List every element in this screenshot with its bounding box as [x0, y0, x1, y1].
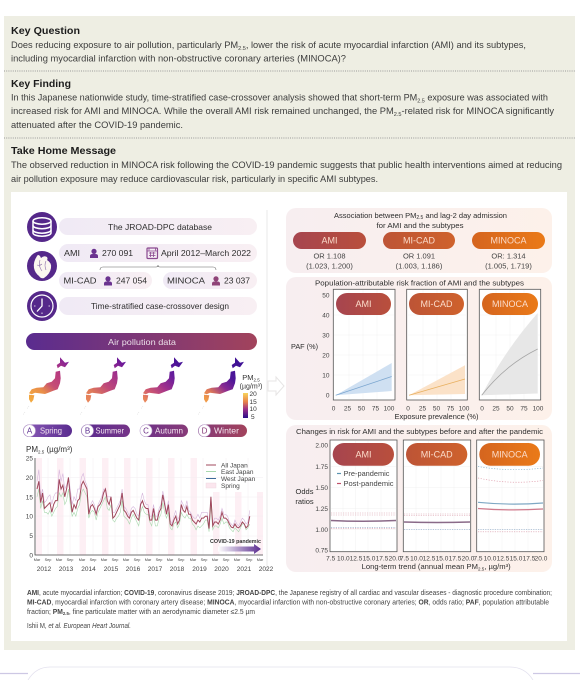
legend: PM2.5 colour bar: 5 — [251, 414, 255, 421]
text: key question: 2.5 — [238, 46, 246, 52]
pill: winter: Winter — [214, 426, 239, 436]
line: East Japan — [37, 489, 250, 532]
chart: monthly PM2.5 time series: (µg/m³) — [44, 445, 73, 454]
text: key question: Key Question — [11, 25, 80, 37]
chart: monthly PM2.5 time series: 25 — [26, 456, 33, 462]
pill: AMI count and period: 270 091 — [102, 248, 133, 258]
panel: changes before and after pandemic: 20.0 — [462, 556, 475, 562]
result: MI-CAD OR — [396, 252, 443, 270]
text: key finding — [11, 78, 554, 130]
panel: population-attributable fraction: 75 — [372, 406, 379, 412]
text: take home message: Take Home Message — [11, 145, 116, 157]
text: abbreviations footnote: AMI, acute myocardial infarction; COVID-19, coronavirus disease 2019; JROAD-DPC, the Japanese registry of all cardiac and vascular diseases - diagnostic procedure combination; — [27, 590, 552, 597]
result: AMI OR: OR 1.108 — [313, 252, 346, 260]
panel: changes before and after pandemic: 1.50 — [315, 485, 328, 492]
panel: changes before and after pandemic: 10.0 — [484, 556, 497, 562]
heading pill: study design — [59, 297, 257, 315]
pill: winter: D — [202, 426, 208, 436]
heading pill: database name: The JROAD-DPC database — [108, 222, 212, 232]
panel: population-attributable fraction: 25 — [492, 406, 500, 412]
map: winter — [198, 357, 244, 415]
legend: PM2.5 colour bar: (µg/m³) — [240, 384, 262, 390]
footer card edge — [0, 672, 580, 674]
panel: changes before and after pandemic: 7.5 — [326, 556, 336, 562]
chart: odds ratios AMI: AMI — [355, 450, 372, 460]
pill: MINOCA — [472, 232, 545, 249]
heading pill: study design: Time-stratified case-crossover design — [91, 301, 229, 311]
chart: monthly PM2.5 time series: 2015 — [104, 566, 119, 573]
panel: changes before and after pandemic: 1.25 — [315, 506, 328, 513]
result: MI-CAD OR: OR 1.091 — [403, 252, 435, 260]
legend: PM2.5 colour bar: 10 — [250, 406, 257, 413]
icon: clock — [27, 291, 57, 321]
panel: changes before and after pandemic: Long-term trend (annual mean PM — [362, 562, 476, 571]
text: abbreviations footnote: MI-CAD, myocardial infarction with coronary artery disease; MINOCA, myocardial infarction with non-obstructive coronary arteries; OR, odds ratio; PAF, population attributable — [27, 600, 549, 606]
result: MINOCA OR: OR: 1.314 — [491, 252, 526, 260]
pill: MI-CAD: MI-CAD — [403, 236, 435, 246]
panel: population-attributable fraction: 75 — [447, 406, 454, 412]
chart: odds ratios MI-CAD: MI-CAD — [421, 450, 453, 460]
chart: PAF MINOCA — [479, 289, 541, 400]
chart: monthly PM2.5 time series: 2019 — [192, 566, 207, 573]
chart: monthly PM2.5 time series: 2020 — [214, 566, 229, 573]
chart: monthly PM2.5 time series: Mar — [56, 558, 63, 562]
arrow: COVID-19 pandemic — [210, 539, 261, 554]
pill: AMI: AMI — [321, 236, 338, 246]
text: key finding: 2.5 — [417, 98, 425, 104]
chart: odds ratios AMI — [330, 440, 397, 552]
panel: changes before and after pandemic: 12.5 — [497, 556, 510, 562]
icon: database — [27, 212, 57, 242]
panel: association odds ratios — [286, 208, 552, 273]
pill: summer: B — [85, 426, 90, 436]
chart: monthly PM2.5 time series: Sep — [201, 558, 207, 562]
text: key finding: attenuated after the COVID-19 pandemic. — [11, 120, 183, 130]
legend: time series lines — [206, 462, 256, 490]
pill: summer — [81, 424, 130, 437]
chart: monthly PM2.5 time series: 2012 — [37, 566, 52, 573]
text: key question — [11, 25, 526, 64]
panel: population-attributable fraction: 0 — [406, 406, 410, 412]
chart: PAF MI-CAD: MI-CAD — [420, 299, 453, 309]
panel: population-attributable fraction: 30 — [322, 332, 330, 339]
panel: changes before and after pandemic: 12.5 — [423, 556, 436, 562]
text: abbreviations footnote: , fine particulate matter with an aerodynamic diameter ≤2.5 µm — [69, 609, 255, 616]
pill: autumn: C — [143, 426, 149, 436]
text: take home message: The observed reduction in MINOCA risk following the COVID-19 pandemic suggests that public health interventions aimed at reducing — [11, 160, 562, 170]
chart: monthly PM2.5 time series: 2022 — [259, 566, 274, 573]
legend: time series lines: Spring — [221, 483, 240, 490]
panel: changes before and after pandemic — [286, 425, 552, 572]
chart: monthly PM2.5 time series: 2.5 — [38, 450, 45, 454]
panel: population-attributable fraction: 50 — [433, 406, 440, 412]
panel: changes before and after pandemic: 2.00 — [315, 442, 328, 450]
panel: changes before and after pandemic: 17.5 — [376, 556, 389, 562]
chart: monthly PM2.5 time series: 0 — [29, 552, 33, 560]
bracket: subtype split — [100, 265, 216, 270]
chart: odds ratios MINOCA: MINOCA — [492, 450, 528, 460]
chart: monthly PM2.5 time series: 15 — [26, 494, 33, 502]
legend: time series lines: West Japan — [221, 476, 256, 483]
chart: PAF AMI: AMI — [355, 299, 372, 309]
chart: PAF MI-CAD — [407, 289, 467, 400]
legend: pandemic periods — [337, 469, 394, 488]
line: West Japan — [37, 470, 250, 526]
chart: monthly PM2.5 time series: Mar — [145, 558, 152, 562]
text: key finding: 2.5 — [394, 112, 402, 118]
panel: changes before and after pandemic: , µg/m³) — [484, 562, 511, 571]
legend: time series lines: East Japan — [221, 469, 254, 476]
map: summer — [80, 357, 126, 415]
legend: PM2.5 colour bar: PM — [242, 373, 253, 382]
icon: heart — [27, 251, 57, 281]
text: abbreviations footnote — [27, 590, 552, 616]
panel: changes before and after pandemic: 10.0 — [337, 556, 350, 562]
panel: association odds ratios: and lag-2 day admission — [423, 211, 507, 220]
chart: monthly PM2.5 time series: Mar — [34, 558, 41, 562]
panel: changes before and after pandemic: 2.5 — [478, 566, 485, 572]
panel: changes before and after pandemic: 15.0 — [510, 556, 523, 562]
chart: monthly PM2.5 time series: Sep — [45, 558, 51, 562]
chart: monthly PM2.5 time series: Mar — [212, 558, 219, 562]
map: spring — [23, 357, 69, 415]
panel: population-attributable fraction: 0 — [332, 406, 336, 412]
chart: monthly PM2.5 time series: Sep — [178, 558, 184, 562]
result: MI-CAD OR: (1.003, 1.186) — [396, 262, 443, 270]
panel: population-attributable fraction: 0 — [326, 392, 330, 399]
text: key finding: -related risk for MINOCA significantly — [402, 106, 554, 116]
chart: monthly PM2.5 time series: Sep — [223, 558, 229, 562]
legend: pandemic periods: Pre-pandemic — [344, 469, 390, 478]
chart: PAF MINOCA: MINOCA — [492, 299, 528, 309]
pill: spring: A — [27, 426, 33, 436]
chart: monthly PM2.5 time series: Mar — [190, 558, 197, 562]
result: AMI OR: (1.023, 1.200) — [306, 262, 353, 270]
chart: monthly PM2.5 time series — [26, 445, 274, 573]
panel: changes before and after pandemic: 0.75 — [315, 548, 328, 554]
panel: changes before and after pandemic: 1.75 — [315, 464, 328, 471]
chart: monthly PM2.5 time series: 2017 — [148, 566, 163, 573]
legend: time series lines: All Japan — [221, 462, 248, 470]
legend: pandemic periods: Post-pandemic — [344, 479, 394, 488]
panel: changes before and after pandemic: 7.5 — [400, 556, 409, 562]
arrow: COVID-19 pandemic: COVID-19 pandemic — [210, 539, 261, 545]
chart: monthly PM2.5 time series: 10 — [26, 514, 33, 520]
chart: monthly PM2.5 time series: PM — [26, 445, 38, 454]
panel: changes before and after pandemic: 15.0 — [436, 556, 449, 562]
pill: MI-CAD count: 247 054 — [116, 276, 147, 286]
pill: MINOCA count — [163, 272, 257, 289]
panel: changes before and after pandemic: Odds — [296, 487, 314, 496]
panel: population-attributable fraction: 100 — [459, 406, 470, 412]
pill: MINOCA count: MINOCA — [167, 276, 205, 286]
panel: population-attributable fraction: 50 — [322, 292, 330, 299]
text: key question: Does reducing exposure to air pollution, particularly PM — [11, 40, 236, 50]
chart: monthly PM2.5 time series: Sep — [156, 558, 162, 562]
panel: changes before and after pandemic: 10.0 — [410, 556, 423, 562]
pill: summer: Summer — [96, 426, 124, 436]
panel: population-attributable fraction: 50 — [506, 406, 514, 412]
pill: MI-CAD count: MI-CAD — [64, 276, 96, 286]
chart: monthly PM2.5 time series: 2016 — [126, 566, 141, 573]
panel: changes before and after pandemic: 20.0 — [389, 556, 402, 562]
panel: graphical abstract white card — [11, 192, 567, 641]
chart: monthly PM2.5 time series: Mar — [123, 558, 130, 562]
panel: changes before and after pandemic: 12.5 — [350, 556, 363, 562]
chart: monthly PM2.5 time series: Mar — [257, 558, 264, 562]
heading bar: air pollution data — [26, 333, 257, 350]
chart: monthly PM2.5 time series: Mar — [234, 558, 241, 562]
chart: monthly PM2.5 time series: Sep — [90, 558, 96, 562]
text: key question: , lower the risk of acute myocardial infarction (AMI) and its subtypes, — [246, 40, 526, 50]
panel: association odds ratios: 2.5 — [416, 215, 424, 221]
chart: monthly PM2.5 time series: 20 — [26, 475, 33, 482]
panel: changes before and after pandemic: 1.00 — [315, 527, 328, 534]
panel: changes before and after pandemic: 15.0 — [363, 556, 376, 562]
pill: autumn — [140, 424, 188, 437]
chart: monthly PM2.5 time series: Sep — [134, 558, 140, 562]
panel: population-attributable fraction — [286, 277, 552, 421]
pill: AMI count and period: AMI — [64, 248, 80, 258]
chart: monthly PM2.5 time series: Mar — [79, 558, 86, 562]
panel: changes before and after pandemic: ratios — [295, 497, 314, 506]
pill: MINOCA: MINOCA — [490, 236, 526, 246]
heading pill: database name — [59, 218, 257, 235]
pill: winter — [198, 424, 247, 437]
season pills — [23, 424, 247, 437]
text: key finding: exposure was associated with — [425, 92, 548, 102]
chart: monthly PM2.5 time series: Mar — [167, 558, 174, 562]
legend: PM2.5 colour bar — [240, 373, 262, 421]
heading bar: air pollution data: Air pollution data — [108, 337, 176, 347]
legend: PM2.5 colour bar: 20 — [250, 391, 257, 398]
map: autumn — [137, 357, 183, 415]
result: AMI OR — [306, 252, 353, 270]
panel: changes before and after pandemic: 17.5 — [449, 556, 462, 562]
chart: monthly PM2.5 time series: Sep — [246, 558, 252, 562]
text: abbreviations footnote: fraction; PM — [27, 609, 63, 616]
panel: changes before and after pandemic: 20.0 — [535, 556, 548, 562]
pill: AMI count and period: April 2012–March 2022 — [161, 248, 251, 258]
chart: odds ratios MINOCA — [477, 440, 544, 552]
pill: MI-CAD count — [59, 272, 152, 289]
arrow: data to results — [268, 377, 284, 395]
text: take home message: air pollution exposure may reduce cardiovascular risk, particularly in specific AMI subtypes. — [11, 174, 378, 184]
chart: monthly PM2.5 time series: 5 — [29, 533, 33, 540]
chart: monthly PM2.5 time series: 2021 — [237, 566, 252, 573]
panel: population-attributable fraction: 100 — [384, 406, 395, 412]
panel: population-attributable fraction: 100 — [533, 406, 544, 412]
panel: association odds ratios: for AMI and the subtypes — [376, 221, 464, 230]
panel: population-attributable fraction: 25 — [419, 406, 426, 412]
text: key finding: Key Finding — [11, 78, 71, 90]
panel: changes before and after pandemic: 17.5 — [523, 556, 536, 562]
text: key finding: In this Japanese nationwide study, time-stratified case-crossover analysis showed that short-term PM — [11, 92, 422, 102]
result: MINOCA OR — [485, 252, 532, 270]
panel: changes before and after pandemic: Changes in risk for AMI and the subtypes before and after the pandemic — [296, 427, 543, 436]
text: take home message — [11, 145, 562, 184]
panel: population-attributable fraction: 20 — [322, 352, 330, 359]
chart: monthly PM2.5 time series: 2018 — [170, 566, 185, 573]
pill: autumn: Autumn — [155, 426, 183, 436]
panel: population-attributable fraction: 0 — [480, 406, 484, 412]
pill: AMI count and period — [59, 244, 257, 262]
pill: spring: Spring — [40, 426, 62, 436]
panel: association odds ratios: Association between PM — [334, 211, 416, 220]
text: citation: Ishii M, et al. European Heart Journal. — [27, 623, 131, 630]
legend: PM2.5 colour bar: 2.5 — [253, 378, 260, 382]
pill: MINOCA count: 23 037 — [224, 276, 250, 286]
pill: AMI — [293, 232, 366, 249]
chart: PAF AMI — [333, 289, 395, 400]
text: key finding: increased risk for AMI and MINOCA. While the overall AMI risk remained unchanged, the PM — [11, 106, 388, 116]
panel: population-attributable fraction: 75 — [520, 406, 528, 412]
panel: population-attributable fraction: 25 — [344, 406, 351, 412]
chart: monthly PM2.5 time series: 2014 — [81, 566, 96, 573]
panel: population-attributable fraction: PAF (%) — [291, 342, 318, 351]
text: key question: including myocardial infarction with non-obstructive coronary arteries (MINOCA)? — [11, 54, 346, 64]
pill: spring — [23, 424, 72, 437]
legend: PM2.5 colour bar: 15 — [250, 399, 257, 406]
panel: changes before and after pandemic: 7.5 — [473, 556, 483, 562]
chart: monthly PM2.5 time series: Mar — [101, 558, 108, 562]
chart: monthly PM2.5 time series: Sep — [112, 558, 118, 562]
text: abbreviations footnote: 2.5 — [63, 611, 69, 616]
panel: population-attributable fraction: Population-attributable risk fraction of AMI and the subtypes — [315, 278, 524, 288]
panel: population-attributable fraction: 10 — [322, 372, 330, 379]
pill: MI-CAD — [383, 232, 455, 249]
chart: odds ratios MI-CAD — [403, 440, 471, 552]
chart: monthly PM2.5 time series: Sep — [67, 558, 73, 562]
panel: population-attributable fraction: Exposure prevalence (%) — [394, 412, 479, 421]
line: All Japan — [37, 477, 250, 529]
result: MINOCA OR: (1.005, 1.719) — [485, 262, 532, 270]
panel: population-attributable fraction: 40 — [322, 312, 330, 319]
chart: monthly PM2.5 time series: 2013 — [59, 566, 74, 573]
panel: population-attributable fraction: 50 — [358, 406, 365, 412]
